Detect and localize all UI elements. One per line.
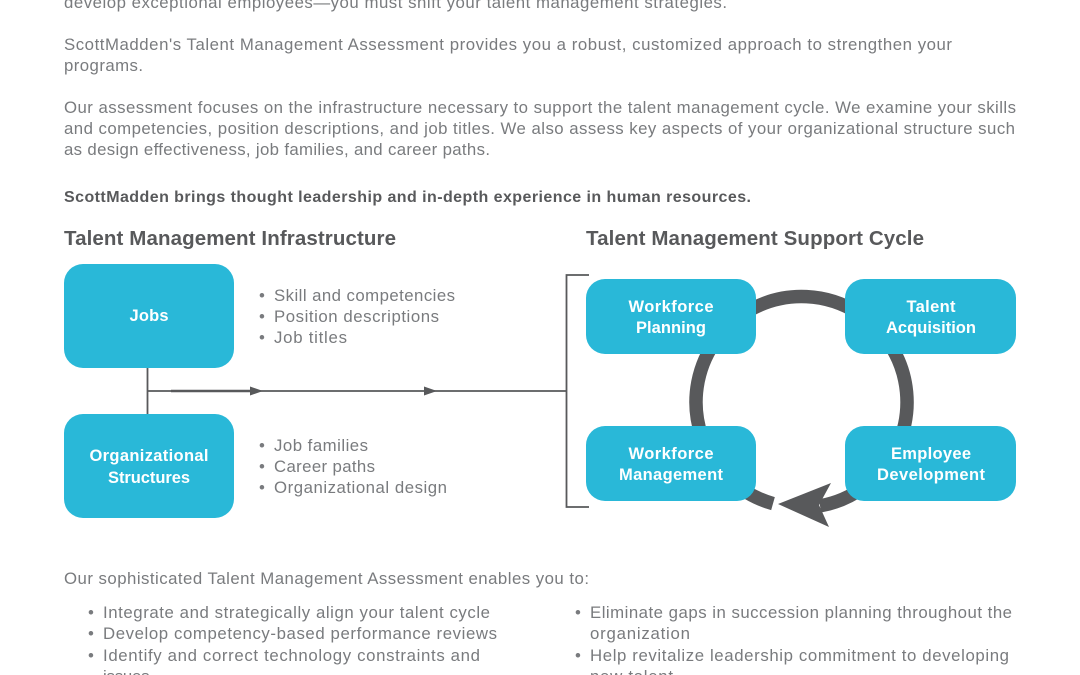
list: Organizational items bbox=[259, 436, 447, 497]
box: Workforce Planning: Workforce bbox=[628, 298, 714, 316]
bold statement: ScottMadden brings thought leadership and in-depth experience in human resources. bbox=[64, 189, 751, 206]
text block: assessment focus: as design effectiveness, job families, and career paths. bbox=[64, 140, 490, 159]
connector: infrastructure to cycle with arrows bbox=[147, 368, 566, 414]
box: Workforce Management: Workforce bbox=[628, 445, 714, 463]
box: Workforce Management: Management bbox=[619, 466, 724, 484]
list: Organizational items: • bbox=[259, 457, 265, 476]
list: benefits right: Help revitalize leadership commitment to developing bbox=[590, 646, 1009, 665]
box: Talent Acquisition bbox=[845, 279, 1016, 354]
heading: support cycle: Talent Management Support Cycle bbox=[586, 227, 924, 250]
box: Talent Acquisition: Acquisition bbox=[886, 319, 976, 337]
cycle ring with arrow bbox=[696, 297, 907, 527]
text block: assessment focus: and competencies, position descriptions, and job titles. We also assess key aspects of your organizational structure such bbox=[64, 119, 1015, 138]
list: benefits right: organization bbox=[590, 624, 690, 643]
box: Employee Development: Development bbox=[877, 466, 986, 484]
text block: assessment focus: Our assessment focuses on the infrastructure necessary to support the talent management cycle. We examine your skills bbox=[64, 98, 1016, 117]
list: benefits left: Develop competency-based performance reviews bbox=[103, 624, 497, 643]
text block: benefits intro: Our sophisticated Talent Management Assessment enables you to: bbox=[64, 569, 589, 588]
box: Workforce Planning bbox=[586, 279, 756, 354]
box: Employee Development bbox=[845, 426, 1016, 501]
box: Organizational Structures: Structures bbox=[108, 469, 190, 487]
text block: assessment overview: programs. bbox=[64, 56, 143, 75]
list: benefits left: Integrate and strategically align your talent cycle bbox=[103, 603, 490, 622]
box: Employee Development: Employee bbox=[891, 445, 971, 463]
list: benefits right: • bbox=[575, 646, 581, 665]
box: Jobs: Jobs bbox=[130, 307, 168, 325]
list: Jobs items: • bbox=[259, 286, 265, 305]
bracket bbox=[566, 275, 589, 507]
text block: assessment overview: ScottMadden's Talent Management Assessment provides you a robust, customized approach to strengthen your bbox=[64, 35, 952, 54]
list: Jobs items: Job titles bbox=[274, 328, 347, 347]
list: benefits left: Identify and correct technology constraints and bbox=[103, 646, 480, 665]
box: Talent Acquisition: Talent bbox=[906, 298, 956, 316]
text block: assessment overview bbox=[64, 35, 952, 75]
list: benefits right: Eliminate gaps in succession planning throughout the bbox=[590, 603, 1012, 622]
list: benefits left: • bbox=[88, 603, 94, 622]
box: Organizational Structures: Organizational bbox=[90, 447, 208, 465]
list: Organizational items: Career paths bbox=[274, 457, 375, 476]
list: Organizational items: • bbox=[259, 478, 265, 497]
list: Jobs items: Skill and competencies bbox=[274, 286, 455, 305]
box: Organizational Structures bbox=[64, 414, 234, 518]
list: benefits left: • bbox=[88, 624, 94, 643]
list: Organizational items: Organizational design bbox=[274, 478, 447, 497]
list: benefits left: • bbox=[88, 646, 94, 665]
list: benefits right bbox=[575, 603, 1012, 675]
heading: infrastructure: Talent Management Infrastructure bbox=[64, 227, 396, 250]
box: Jobs bbox=[64, 264, 234, 368]
list: Jobs items: • bbox=[259, 307, 265, 326]
list: Jobs items: • bbox=[259, 328, 265, 347]
box: Workforce Planning: Planning bbox=[636, 319, 706, 337]
list: Jobs items: Position descriptions bbox=[274, 307, 439, 326]
text block: assessment focus bbox=[64, 98, 1016, 159]
list: benefits left bbox=[88, 603, 497, 675]
box: Workforce Management bbox=[586, 426, 756, 501]
list: Organizational items: Job families bbox=[274, 436, 368, 455]
list: Organizational items: • bbox=[259, 436, 265, 455]
list: benefits right: • bbox=[575, 603, 581, 622]
list: Jobs items bbox=[259, 286, 455, 347]
